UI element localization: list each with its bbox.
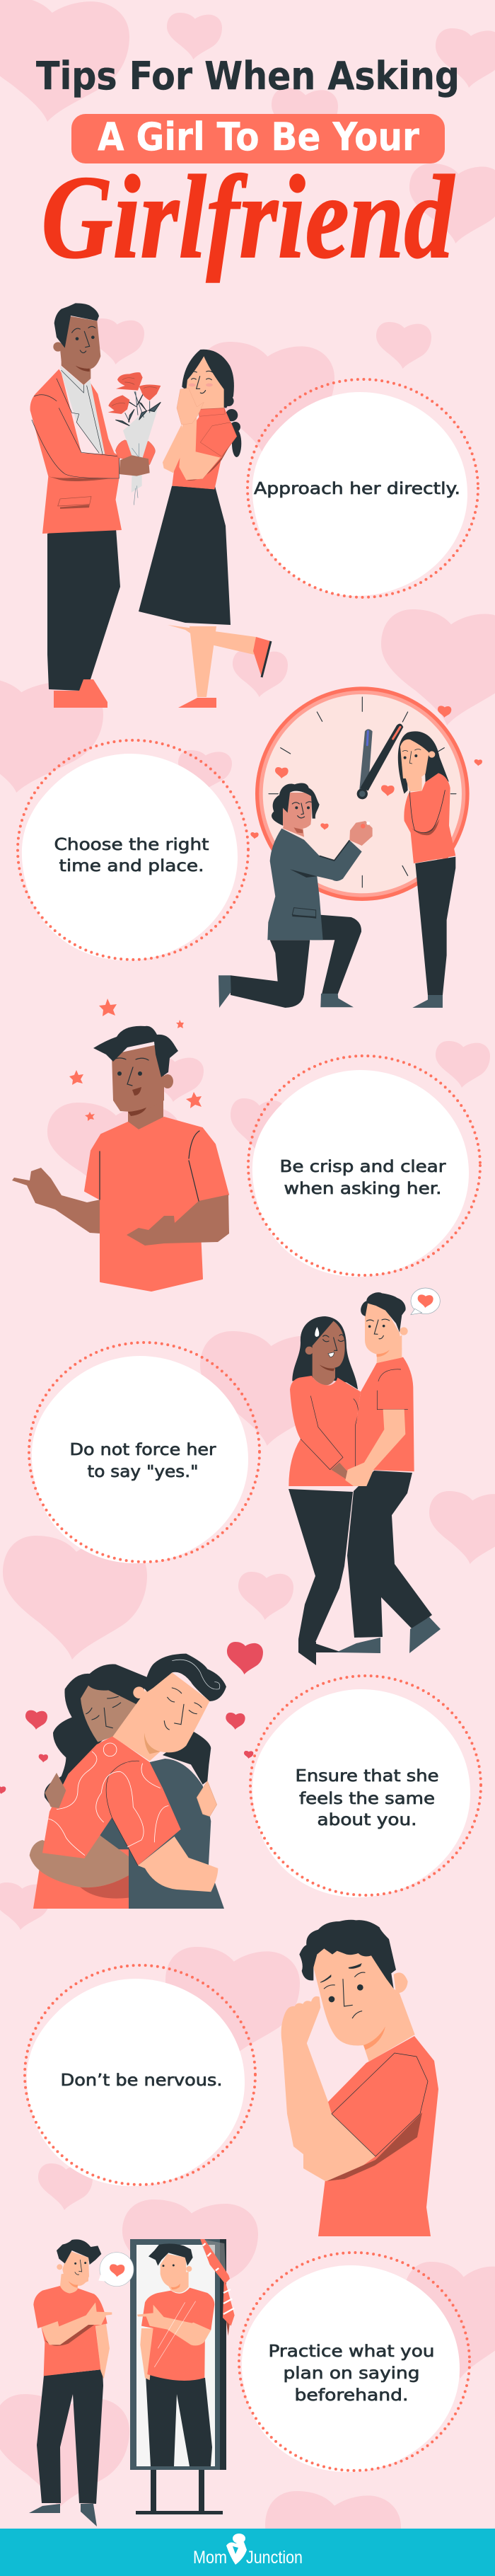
tip text: Don’t be nervous. <box>61 2071 222 2090</box>
tip text: time and place. <box>59 857 204 875</box>
red hearts <box>0 1642 263 1794</box>
man's legs and shoes <box>47 519 120 708</box>
tip text: to say "yes." <box>88 1463 198 1481</box>
tip text: Be crisp and clear <box>280 1158 446 1176</box>
speech bubble <box>18 740 248 960</box>
panel: tip 6 <box>25 1920 438 2236</box>
upper bodies <box>289 1288 440 1486</box>
panel: tip 4 <box>29 1288 441 1665</box>
reflection legs <box>146 2374 212 2466</box>
small hearts <box>250 706 482 839</box>
tip text <box>269 2342 434 2405</box>
illustration: hugging couple <box>0 1642 263 1909</box>
tip text: Choose the right <box>54 836 209 854</box>
tip text <box>296 1767 438 1829</box>
tip text: feels the same <box>299 1790 435 1808</box>
logo <box>193 2534 303 2568</box>
tip text <box>54 836 209 875</box>
woman <box>289 1316 361 1486</box>
arm shadow <box>327 2112 422 2181</box>
tip text: Practice what you <box>269 2342 434 2361</box>
kneeling man <box>219 783 373 1008</box>
illustration: man with bouquet and woman <box>30 303 271 708</box>
illustration: couple holding hands <box>289 1288 441 1665</box>
mirror frame <box>130 2239 226 2514</box>
tip text: beforehand. <box>294 2386 409 2405</box>
panel: tip 7 <box>29 2239 470 2526</box>
tip text: Ensure that she <box>296 1767 438 1786</box>
legs <box>289 1471 441 1665</box>
speech bubble <box>239 2253 470 2472</box>
title line 1: Tips For When Asking <box>36 54 460 98</box>
hanging tie <box>200 2239 235 2336</box>
woman's upper body <box>163 350 241 495</box>
title <box>36 54 460 283</box>
illustration: man practising at mirror <box>29 2239 235 2526</box>
illustration: nervous man <box>281 1920 438 2236</box>
speech bubble <box>248 1056 480 1277</box>
man <box>12 1026 229 1291</box>
man <box>331 1292 414 1486</box>
panel: tip 1 <box>30 303 478 708</box>
logo: Junction <box>246 2548 303 2568</box>
man <box>33 2239 112 2379</box>
title line 2: A Girl To Be Your <box>98 115 419 159</box>
upper bodies <box>33 2239 235 2381</box>
illustration: proposal in front of clock <box>219 686 482 1008</box>
torso <box>318 2036 438 2236</box>
speech bubble with heart <box>98 2253 134 2287</box>
woman's skirt and legs <box>139 486 271 708</box>
clock <box>255 686 470 901</box>
sleeve <box>332 2053 428 2156</box>
tip text: plan on saying <box>283 2364 420 2383</box>
speech bubble <box>250 1676 481 1897</box>
man's upper body <box>30 303 122 534</box>
stars <box>69 999 202 1121</box>
reflection <box>137 2243 214 2381</box>
footer <box>0 2529 495 2576</box>
tip text: about you. <box>317 1811 417 1829</box>
logo icon <box>226 2534 247 2565</box>
man's body and her arms <box>30 1736 224 1909</box>
speech bubble <box>29 1342 260 1563</box>
woman's hair and face <box>45 1664 211 1807</box>
tip text <box>69 1441 216 1481</box>
tip text: when asking her. <box>284 1180 441 1198</box>
tip text: Approach her directly. <box>254 480 460 498</box>
arm <box>282 2042 375 2181</box>
speech bubble with heart <box>411 1288 440 1315</box>
logo wordmark: Mom <box>193 2548 227 2568</box>
illustration: man talking with stars <box>12 999 229 1291</box>
panel: tip 5 <box>0 1642 481 1909</box>
speech bubble <box>25 1965 255 2186</box>
head and hand <box>281 1920 415 2062</box>
panel: tip 2 <box>18 686 482 1008</box>
speech bubble <box>248 379 478 597</box>
man's head <box>112 1654 226 1761</box>
panel: tip 3 <box>12 999 480 1291</box>
title pill <box>71 114 445 163</box>
standing woman <box>398 731 455 1008</box>
tip text <box>280 1158 446 1198</box>
bouquet <box>108 372 161 505</box>
man's legs <box>29 2369 103 2526</box>
tip text: Do not force her <box>69 1441 216 1459</box>
